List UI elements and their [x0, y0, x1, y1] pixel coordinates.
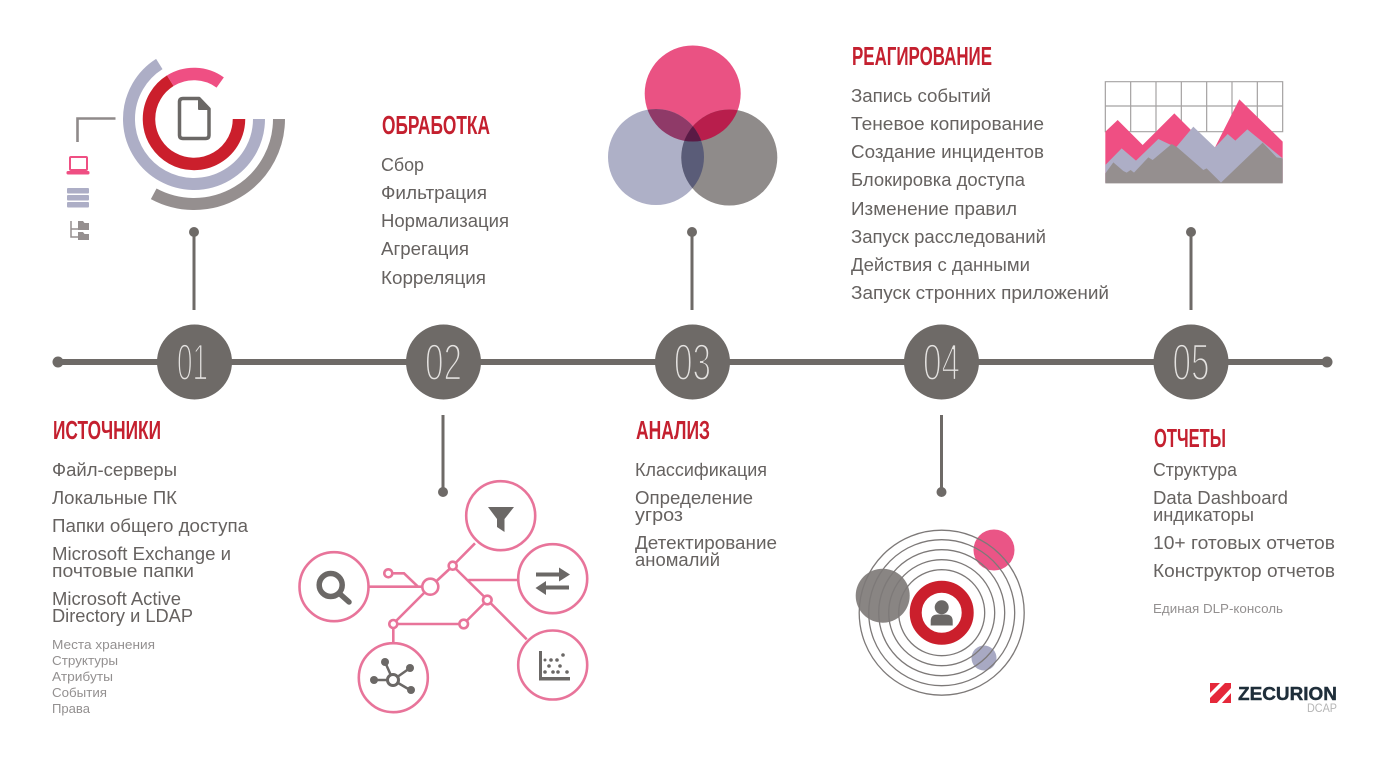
step 05 marker: 05 [1172, 334, 1210, 392]
list: source details: События [52, 685, 107, 700]
logo: ZECURION [1238, 683, 1337, 704]
step 03 marker: 03 [674, 334, 711, 392]
connector 05 [1186, 227, 1196, 310]
list: response: Теневое копирование [851, 114, 1044, 134]
list: analysis: Определение [635, 488, 753, 508]
list: source details: Места хранения [52, 637, 155, 652]
icon: magnifier [319, 574, 349, 602]
list: reports: 10+ готовых отчетов [1153, 533, 1335, 553]
icon: source rings [129, 64, 279, 204]
list: processing: Агрегация [381, 239, 469, 259]
step 03 marker [655, 324, 730, 400]
connector 02 [438, 415, 448, 497]
icon: funnel [488, 507, 514, 532]
list: reports [1153, 460, 1335, 581]
step 04 marker: 04 [923, 334, 960, 392]
list: response [851, 86, 1109, 303]
connector 04 [936, 415, 946, 497]
list: response: Изменение правил [851, 199, 1017, 219]
list: response: Блокировка доступа [851, 170, 1026, 190]
icon: file [180, 98, 209, 138]
heading: Источники: ИСТОЧНИКИ [53, 415, 161, 445]
list: source details [52, 637, 155, 716]
list: response: Действия с данными [851, 255, 1030, 275]
list: analysis: Детектирование [635, 533, 777, 553]
list: source details: Структуры [52, 653, 118, 668]
node: hub [422, 579, 438, 595]
list: reports: Конструктор отчетов [1153, 561, 1335, 581]
list: sources: почтовые папки [52, 561, 194, 581]
list: processing: Нормализация [381, 211, 509, 231]
icon: server [67, 188, 89, 208]
logo: DCAP [1307, 701, 1337, 715]
list: sources: Папки общего доступа [52, 516, 249, 536]
icon: user [931, 600, 953, 626]
list: source details: Права [52, 701, 91, 716]
list: response: Создание инцидентов [851, 142, 1044, 162]
list: processing: Корреляция [381, 268, 486, 288]
heading: Обработка: ОБРАБОТКА [382, 110, 490, 140]
list: response: Запуск расследований [851, 227, 1046, 247]
list: analysis: Классификация [635, 460, 767, 480]
timeline [52, 324, 1332, 400]
list: analysis: аномалий [635, 550, 720, 570]
list: processing [381, 155, 509, 288]
step 01 marker: 01 [177, 334, 208, 392]
connector 03 [687, 227, 697, 310]
list: processing: Фильтрация [381, 183, 487, 203]
connector 01 [189, 227, 199, 310]
heading: Реагирование: РЕАГИРОВАНИЕ [852, 41, 992, 71]
list: reports: Data Dashboard [1153, 488, 1288, 508]
list: sources [52, 460, 249, 626]
icon: graph [370, 658, 415, 694]
icon: transfer arrows [536, 568, 570, 595]
list: sources: Файл-серверы [52, 460, 177, 480]
list: sources: Локальные ПК [52, 488, 178, 508]
orbit diagram [856, 530, 1024, 695]
logo mark [1209, 682, 1232, 704]
list: reports: индикаторы [1153, 505, 1254, 525]
list: response: Запуск стронних приложений [851, 283, 1109, 303]
list: sources: Directory и LDAP [52, 606, 193, 626]
step 02 marker [406, 324, 481, 400]
list: analysis: угроз [635, 505, 683, 525]
step 02 marker: 02 [425, 334, 462, 392]
heading: Отчеты: ОТЧЕТЫ [1154, 423, 1226, 453]
list: reports: Структура [1153, 460, 1238, 480]
icon: scatter chart [539, 651, 570, 680]
list: sources: Microsoft Active [52, 589, 181, 609]
heading: Анализ: АНАЛИЗ [636, 415, 710, 445]
note: console: Единая DLP-консоль [1153, 601, 1283, 616]
list: processing: Сбор [381, 155, 424, 175]
area chart [1105, 82, 1283, 183]
step 05 marker [1154, 324, 1228, 400]
step 04 marker [904, 324, 979, 400]
icon: folder tree [71, 221, 89, 240]
red ring [916, 587, 968, 639]
logo [1209, 682, 1337, 715]
venn diagram [608, 46, 777, 206]
step 01 marker [157, 324, 232, 400]
bracket line [78, 118, 116, 142]
processing network [300, 481, 587, 712]
icon: laptop [66, 157, 90, 174]
list: response: Запись событий [851, 86, 991, 106]
list: analysis [635, 460, 777, 570]
list: sources: Microsoft Exchange и [52, 544, 231, 564]
list: source details: Атрибуты [52, 669, 113, 684]
